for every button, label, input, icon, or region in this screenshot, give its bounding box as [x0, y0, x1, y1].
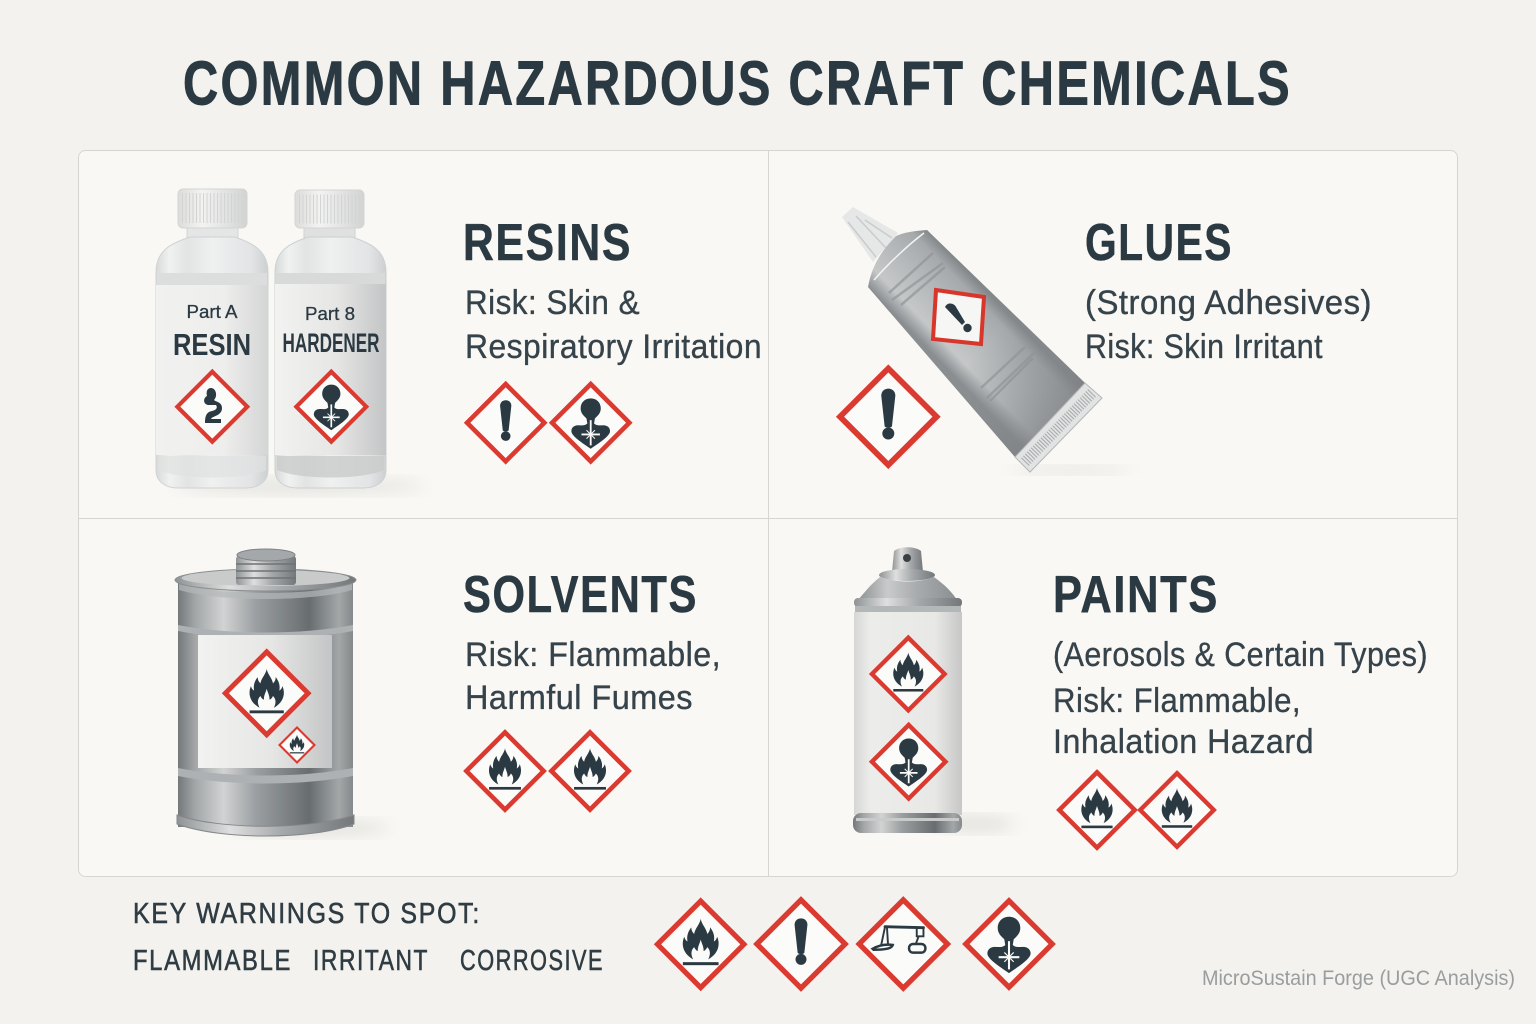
heading: paints: PAINTS	[1053, 566, 1219, 624]
legend labels: IRRITANT	[313, 945, 429, 977]
legend heading: KEY WARNINGS TO SPOT:	[133, 898, 481, 930]
illustration: resin and hardener bottles	[156, 189, 425, 492]
icon: irritant pictogram	[840, 368, 937, 465]
legend labels: FLAMMABLE	[133, 945, 292, 977]
risk text: paints: Risk: Flammable,	[1053, 682, 1301, 720]
icon: large flammable label	[225, 652, 308, 735]
panel frame	[78, 150, 1458, 876]
panel: paints	[853, 547, 1428, 848]
legend labels: CORROSIVE	[460, 945, 604, 977]
risk text: resins: Respiratory Irritation	[465, 328, 762, 366]
risk text: paints: Inhalation Hazard	[1053, 723, 1314, 761]
risk text: resins	[465, 284, 762, 366]
panel: glues	[840, 207, 1372, 473]
source credit: MicroSustain Forge (UGC Analysis)	[1202, 967, 1515, 990]
key warnings legend	[133, 898, 1052, 988]
risk text: solvents	[465, 636, 721, 717]
bottle: part A resin	[156, 189, 268, 488]
heading: solvents: SOLVENTS	[463, 566, 698, 624]
illustration: metal solvent can	[175, 549, 390, 836]
icon: small flammable label	[280, 728, 314, 762]
icon: flammable label	[872, 638, 945, 710]
icon: flammable pictogram	[551, 732, 629, 810]
bottle: part A resin: RESIN	[173, 327, 251, 362]
icon: health hazard label	[872, 725, 946, 798]
illustration: glue tube	[842, 207, 1130, 473]
heading: resins: RESINS	[463, 214, 632, 272]
icon: flammable pictogram	[1059, 772, 1135, 848]
icon: irritant pictogram	[467, 384, 544, 461]
risk text: paints	[1053, 636, 1428, 761]
icon: corrosive pictogram	[859, 900, 947, 988]
icon: health hazard pictogram	[966, 901, 1052, 987]
risk text: glues: (Strong Adhesives)	[1085, 284, 1372, 322]
risk text: glues	[1085, 284, 1372, 366]
icon: flammable pictogram	[1140, 773, 1214, 847]
panel: resins	[156, 189, 762, 492]
risk text: solvents: Harmful Fumes	[465, 679, 693, 717]
bottle: part 8 hardener: Part 8	[305, 304, 355, 324]
icon: flammable pictogram	[657, 901, 744, 988]
icon: health hazard pictogram	[552, 384, 629, 461]
risk text: glues: Risk: Skin Irritant	[1085, 328, 1323, 366]
icon: flammable pictogram	[466, 732, 544, 810]
legend labels	[133, 945, 604, 977]
risk text: solvents: Risk: Flammable,	[465, 636, 721, 674]
icon: irritant pictogram	[757, 900, 845, 988]
illustration: aerosol spray can	[853, 547, 1015, 833]
bottle: part A resin: Part A	[186, 302, 238, 322]
heading: glues: GLUES	[1085, 214, 1233, 272]
bottle: part 8 hardener: HARDENER	[282, 328, 380, 358]
risk text: resins: Risk: Skin &	[465, 284, 640, 322]
bottle: part 8 hardener	[275, 190, 386, 488]
risk text: paints: (Aerosols & Certain Types)	[1053, 636, 1428, 674]
panel: solvents	[175, 549, 721, 836]
